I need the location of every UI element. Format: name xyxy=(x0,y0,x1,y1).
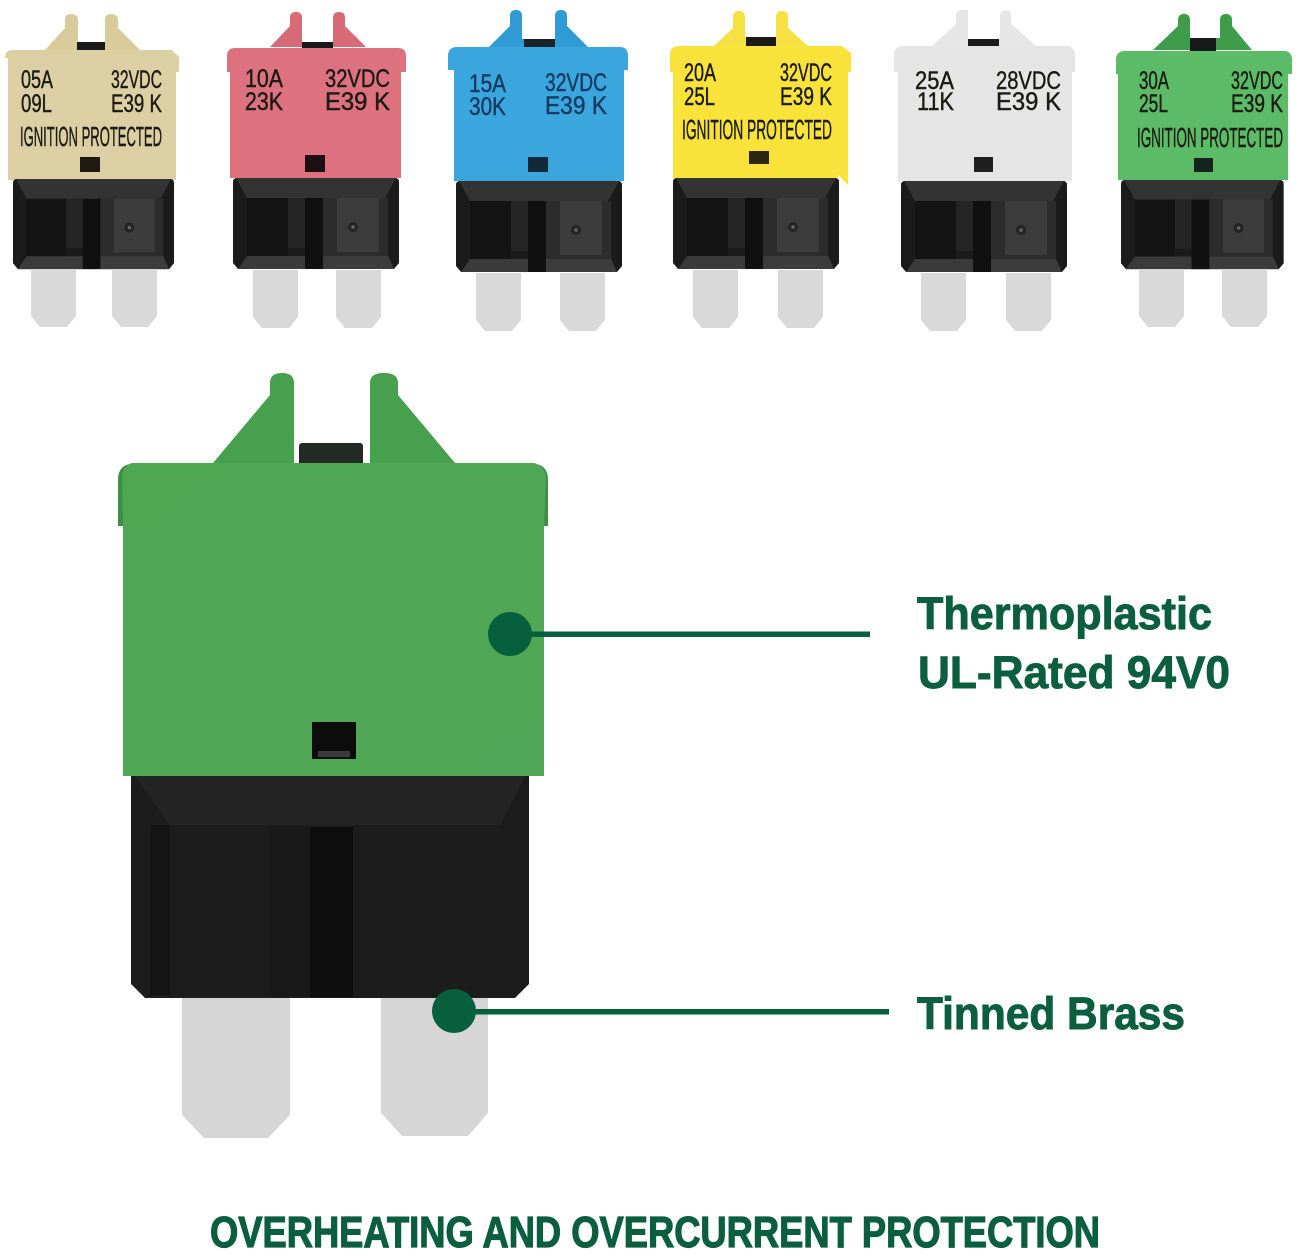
rating text xyxy=(469,69,607,121)
clips xyxy=(45,14,140,50)
clips xyxy=(213,373,455,463)
fuse: 10A pink: 32VDC xyxy=(325,65,390,93)
black base xyxy=(131,776,529,998)
fuse: 20A yellow: 25L xyxy=(684,83,715,111)
fuse: 10A pink xyxy=(227,12,406,328)
clips xyxy=(270,12,366,47)
housing xyxy=(227,48,406,178)
rating text: 32VDC xyxy=(545,69,607,97)
callout text: Thermoplastic xyxy=(917,588,1212,639)
callout text: rating: UL-Rated 94V0 xyxy=(918,647,1230,698)
fuse: 5A tan: 09L xyxy=(21,90,52,118)
base and blades xyxy=(901,181,1067,272)
fuse: 5A tan: 32VDC xyxy=(111,66,162,94)
clips xyxy=(489,10,588,47)
large green fuse xyxy=(118,373,548,1138)
fuse: 15A blue xyxy=(448,10,628,331)
housing xyxy=(122,463,546,776)
fuse: 25A white: 11K xyxy=(917,88,954,116)
window xyxy=(312,722,356,759)
fuse: 20A yellow: IGNITION PROTECTED xyxy=(682,114,832,145)
callout: tinned brass xyxy=(432,988,1185,1039)
clips xyxy=(1153,14,1252,50)
fuse: 30A green: E39 K xyxy=(1231,90,1283,118)
base and blades xyxy=(456,181,622,272)
base and blades xyxy=(1121,180,1284,269)
fuse: 30A green: 25L xyxy=(1139,90,1168,118)
blades xyxy=(182,998,290,1138)
side wings xyxy=(118,464,548,526)
rating text: 25A xyxy=(915,67,954,95)
fuse: 30A green xyxy=(1116,14,1292,327)
rating text: 20A xyxy=(684,59,716,87)
rating text: E39 K xyxy=(545,92,607,120)
base and blades xyxy=(233,178,399,269)
callout: thermoplastic xyxy=(488,588,1212,656)
rating text: 05A xyxy=(21,66,53,94)
rating text: 30K xyxy=(469,93,506,121)
bottom title: OVERHEATING AND OVERCURRENT PROTECTION xyxy=(210,1208,1100,1256)
fuse: 25A white: E39 K xyxy=(996,88,1061,116)
clips xyxy=(932,10,1036,46)
housing xyxy=(894,46,1075,181)
base and blades xyxy=(673,178,839,269)
clips xyxy=(714,11,808,46)
rating text: 30A xyxy=(1139,67,1169,95)
base and blades xyxy=(13,179,174,269)
rating text: 10A xyxy=(245,65,283,93)
rating text: 15A xyxy=(469,70,506,98)
housing xyxy=(5,50,179,180)
fuse: 5A tan xyxy=(5,14,179,327)
fuse: 20A yellow: E39 K xyxy=(780,83,832,111)
fuse: 20A yellow: 32VDC xyxy=(780,59,832,87)
callout text: Tinned Brass xyxy=(917,988,1185,1039)
fuse: 25A white: 28VDC xyxy=(996,67,1061,95)
fuse: 5A tan: E39 K xyxy=(111,90,162,118)
fuse: 10A pink: 23K xyxy=(245,88,283,116)
housing xyxy=(448,47,628,181)
fuse: 20A yellow xyxy=(670,11,851,328)
housing xyxy=(1116,51,1292,180)
fuse: 25A white xyxy=(894,10,1075,331)
fuse: 10A pink: E39 K xyxy=(325,88,390,116)
housing xyxy=(670,46,851,185)
fuse: 5A tan: IGNITION PROTECTED xyxy=(20,121,162,152)
